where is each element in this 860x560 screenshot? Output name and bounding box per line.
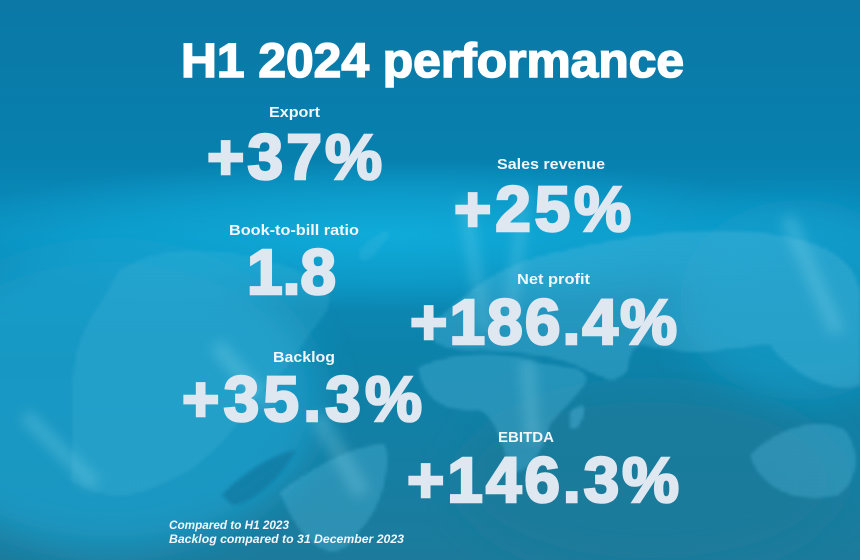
world map bbox=[70, 231, 860, 551]
footnote: Compared to H1 2023 bbox=[169, 518, 289, 532]
metric: book-to-bill ratio: 1.8 bbox=[247, 236, 336, 308]
metric: book-to-bill ratio bbox=[229, 222, 359, 308]
metric: export: +37% bbox=[207, 121, 382, 193]
footnote bbox=[169, 518, 404, 546]
metric: backlog: Backlog bbox=[273, 349, 335, 366]
metric: EBITDA: EBITDA bbox=[498, 429, 554, 446]
metric: sales revenue: Sales revenue bbox=[497, 156, 605, 173]
metric: net profit: Net profit bbox=[517, 271, 590, 288]
metric: backlog: +35.3% bbox=[182, 363, 422, 435]
metric: EBITDA: +146.3% bbox=[407, 444, 679, 516]
metric: sales revenue: +25% bbox=[454, 173, 631, 245]
footnote: Backlog compared to 31 December 2023 bbox=[169, 532, 404, 546]
title: H1 2024 performance bbox=[181, 35, 684, 88]
metric: net profit: +186.4% bbox=[410, 286, 677, 358]
metric: book-to-bill ratio: Book-to-bill ratio bbox=[229, 222, 359, 239]
light beams bbox=[20, 190, 845, 498]
metric: export: Export bbox=[269, 104, 320, 121]
